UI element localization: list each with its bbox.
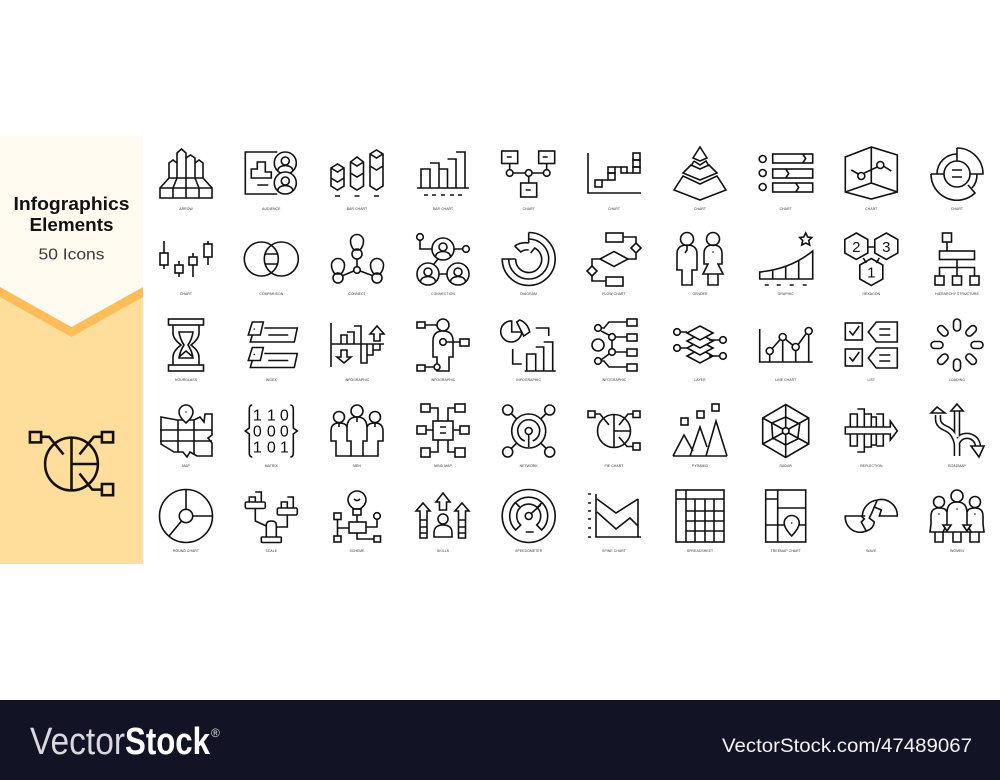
icon: speedometer xyxy=(502,490,555,553)
label: CHART: CHART xyxy=(865,207,877,211)
icon: chart network xyxy=(502,151,555,211)
icon: hierarchy structure xyxy=(935,233,979,296)
label: SCALE: SCALE xyxy=(265,549,278,553)
label: INFOGRAPHIC: INFOGRAPHIC xyxy=(431,378,456,382)
label: LAYER: LAYER xyxy=(694,378,706,382)
icon: matrix: 1 xyxy=(253,440,262,456)
label: PIE CHART: PIE CHART xyxy=(605,464,623,468)
icon: matrix: 0 xyxy=(280,424,289,440)
icon: map xyxy=(160,405,212,468)
icon: layer xyxy=(674,326,726,382)
label: FLOW CHART: FLOW CHART xyxy=(602,292,626,296)
stock image id: VectorStock.com/47489067 xyxy=(722,735,972,757)
icon: hexagon: 1 xyxy=(867,264,875,282)
label: CHART: CHART xyxy=(180,292,192,296)
icon: treemap chart xyxy=(766,490,806,553)
icon: matrix: 0 xyxy=(267,424,276,440)
label: CONNECT: CONNECT xyxy=(348,292,366,296)
icon: mind map xyxy=(417,404,469,468)
icon: skills xyxy=(416,493,469,553)
label: MAP: MAP xyxy=(182,464,190,468)
icon: arrow xyxy=(160,149,212,211)
icon: flow chart xyxy=(587,233,641,296)
label: TREEMAP CHART: TREEMAP CHART xyxy=(771,549,801,553)
icon: candlestick chart xyxy=(160,241,212,296)
label: INDEX: INDEX xyxy=(266,378,277,382)
icon: spine chart xyxy=(588,494,641,553)
icon: matrix xyxy=(245,405,297,468)
icon: scheme xyxy=(334,491,380,553)
icon: bar chart xyxy=(417,152,469,211)
label: ROADMAP: ROADMAP xyxy=(948,464,967,468)
label: LINE CHART: LINE CHART xyxy=(775,378,796,382)
logo: VectorStock: VectorStock xyxy=(30,721,211,763)
icon: list xyxy=(845,322,897,382)
label: BAR CHART: BAR CHART xyxy=(347,207,367,211)
label: LOADING: LOADING xyxy=(949,378,965,382)
icon: reflection xyxy=(845,409,897,468)
icon: 3D bar chart xyxy=(331,150,383,211)
icon: loading xyxy=(931,319,983,382)
icon: pie chart xyxy=(588,411,640,468)
icon: infographic person xyxy=(417,319,469,382)
icon: wave xyxy=(845,499,897,553)
label: MEN: MEN xyxy=(353,464,361,468)
icon: chart steps xyxy=(588,153,641,211)
logo: registered mark: ® xyxy=(211,726,220,740)
heading: Infographics Elements: Infographics xyxy=(14,193,130,214)
label: INFOGRAPHIC: INFOGRAPHIC xyxy=(602,378,627,382)
label: MIND MAP: MIND MAP xyxy=(434,464,453,468)
label: HEXAGON: HEXAGON xyxy=(862,292,881,296)
label: RADAR: RADAR xyxy=(780,464,792,468)
label: ROUND CHART: ROUND CHART xyxy=(173,549,199,553)
subheading: 50 Icons: 50 Icons xyxy=(38,246,105,264)
label: NETWORK: NETWORK xyxy=(520,464,538,468)
icon: diagram xyxy=(502,232,555,296)
label: WAVE: WAVE xyxy=(866,549,877,553)
label: HOURGLASS: HOURGLASS xyxy=(175,378,198,382)
label: SPREADSHEET: SPREADSHEET xyxy=(687,549,713,553)
icon: infographic tree xyxy=(592,319,637,382)
label: AUDIENCE: AUDIENCE xyxy=(262,207,281,211)
icon: graphic growth xyxy=(760,233,813,296)
icon: radar xyxy=(763,404,809,468)
icon: round chart xyxy=(160,490,212,553)
icon: hexagon: 2 xyxy=(852,239,860,256)
label: CHART: CHART xyxy=(780,207,792,211)
icon: scale xyxy=(245,492,297,553)
label: BAR CHART: BAR CHART xyxy=(433,207,453,211)
icon: women xyxy=(930,490,984,553)
icon: audience xyxy=(245,152,296,211)
panel: footer bar xyxy=(0,700,1000,780)
icon: roadmap xyxy=(931,404,984,468)
icon: pyramid xyxy=(673,404,727,468)
icon: hexagon xyxy=(845,233,898,296)
panel: title sidebar xyxy=(0,136,143,564)
icon: chart list xyxy=(759,154,813,211)
icon: spreadsheet xyxy=(676,490,724,553)
label: INFOGRAPHIC: INFOGRAPHIC xyxy=(345,378,370,382)
icon: index xyxy=(248,322,297,382)
icon: connection xyxy=(417,234,469,296)
icon: connect xyxy=(332,234,384,296)
icon: matrix: 1 xyxy=(267,408,276,424)
icon: matrix: 1 xyxy=(253,408,262,424)
icon: infographic bars xyxy=(331,323,384,382)
icon: matrix: 1 xyxy=(280,440,289,456)
label: WOMEN: WOMEN xyxy=(950,549,964,553)
label: PYRAMID: PYRAMID xyxy=(692,464,709,468)
label: CONNECTION: CONNECTION xyxy=(431,292,455,296)
icon: comparison venn xyxy=(244,242,298,296)
label: REFLECTION: REFLECTION xyxy=(860,464,883,468)
label: GRAPHIC: GRAPHIC xyxy=(778,292,794,296)
label: SCHEME: SCHEME xyxy=(349,549,365,553)
label: GENDER: GENDER xyxy=(692,292,708,296)
label: CHART: CHART xyxy=(523,207,535,211)
icon: network xyxy=(503,405,555,468)
label: CHART: CHART xyxy=(694,207,706,211)
label: SPINE CHART: SPINE CHART xyxy=(602,549,626,553)
icon: hexagon: 3 xyxy=(882,239,890,256)
label: COMPARISON: COMPARISON xyxy=(259,292,284,296)
heading: Infographics Elements: Elements xyxy=(30,214,114,235)
icon: matrix: 0 xyxy=(267,440,276,456)
icon: hourglass xyxy=(168,319,204,382)
label: INFOGRAPHIC: INFOGRAPHIC xyxy=(516,378,541,382)
label: MATRIX: MATRIX xyxy=(265,464,279,468)
label: LIST: LIST xyxy=(868,378,875,382)
icon: pyramid chart xyxy=(674,147,726,211)
label: ARROW: ARROW xyxy=(179,207,193,211)
label: SPEEDOMETER: SPEEDOMETER xyxy=(515,549,543,553)
label: HIERARCHY STRUCTURE: HIERARCHY STRUCTURE xyxy=(935,292,979,296)
label: SKILLS: SKILLS xyxy=(437,549,450,553)
icon: infographic pie and bars xyxy=(501,320,556,382)
icon: hero pie chart xyxy=(30,432,113,495)
icon: gender xyxy=(677,232,723,296)
icon: line chart xyxy=(760,328,813,382)
icon: matrix: 0 xyxy=(253,424,262,440)
icon: men xyxy=(331,405,383,468)
label: CHART: CHART xyxy=(608,207,620,211)
icon: matrix: 0 xyxy=(280,408,289,424)
icon: chart cube xyxy=(845,147,897,211)
label: CHART: CHART xyxy=(951,207,963,211)
icon: chart donut xyxy=(931,148,983,211)
label: DIAGRAM: DIAGRAM xyxy=(520,292,537,296)
